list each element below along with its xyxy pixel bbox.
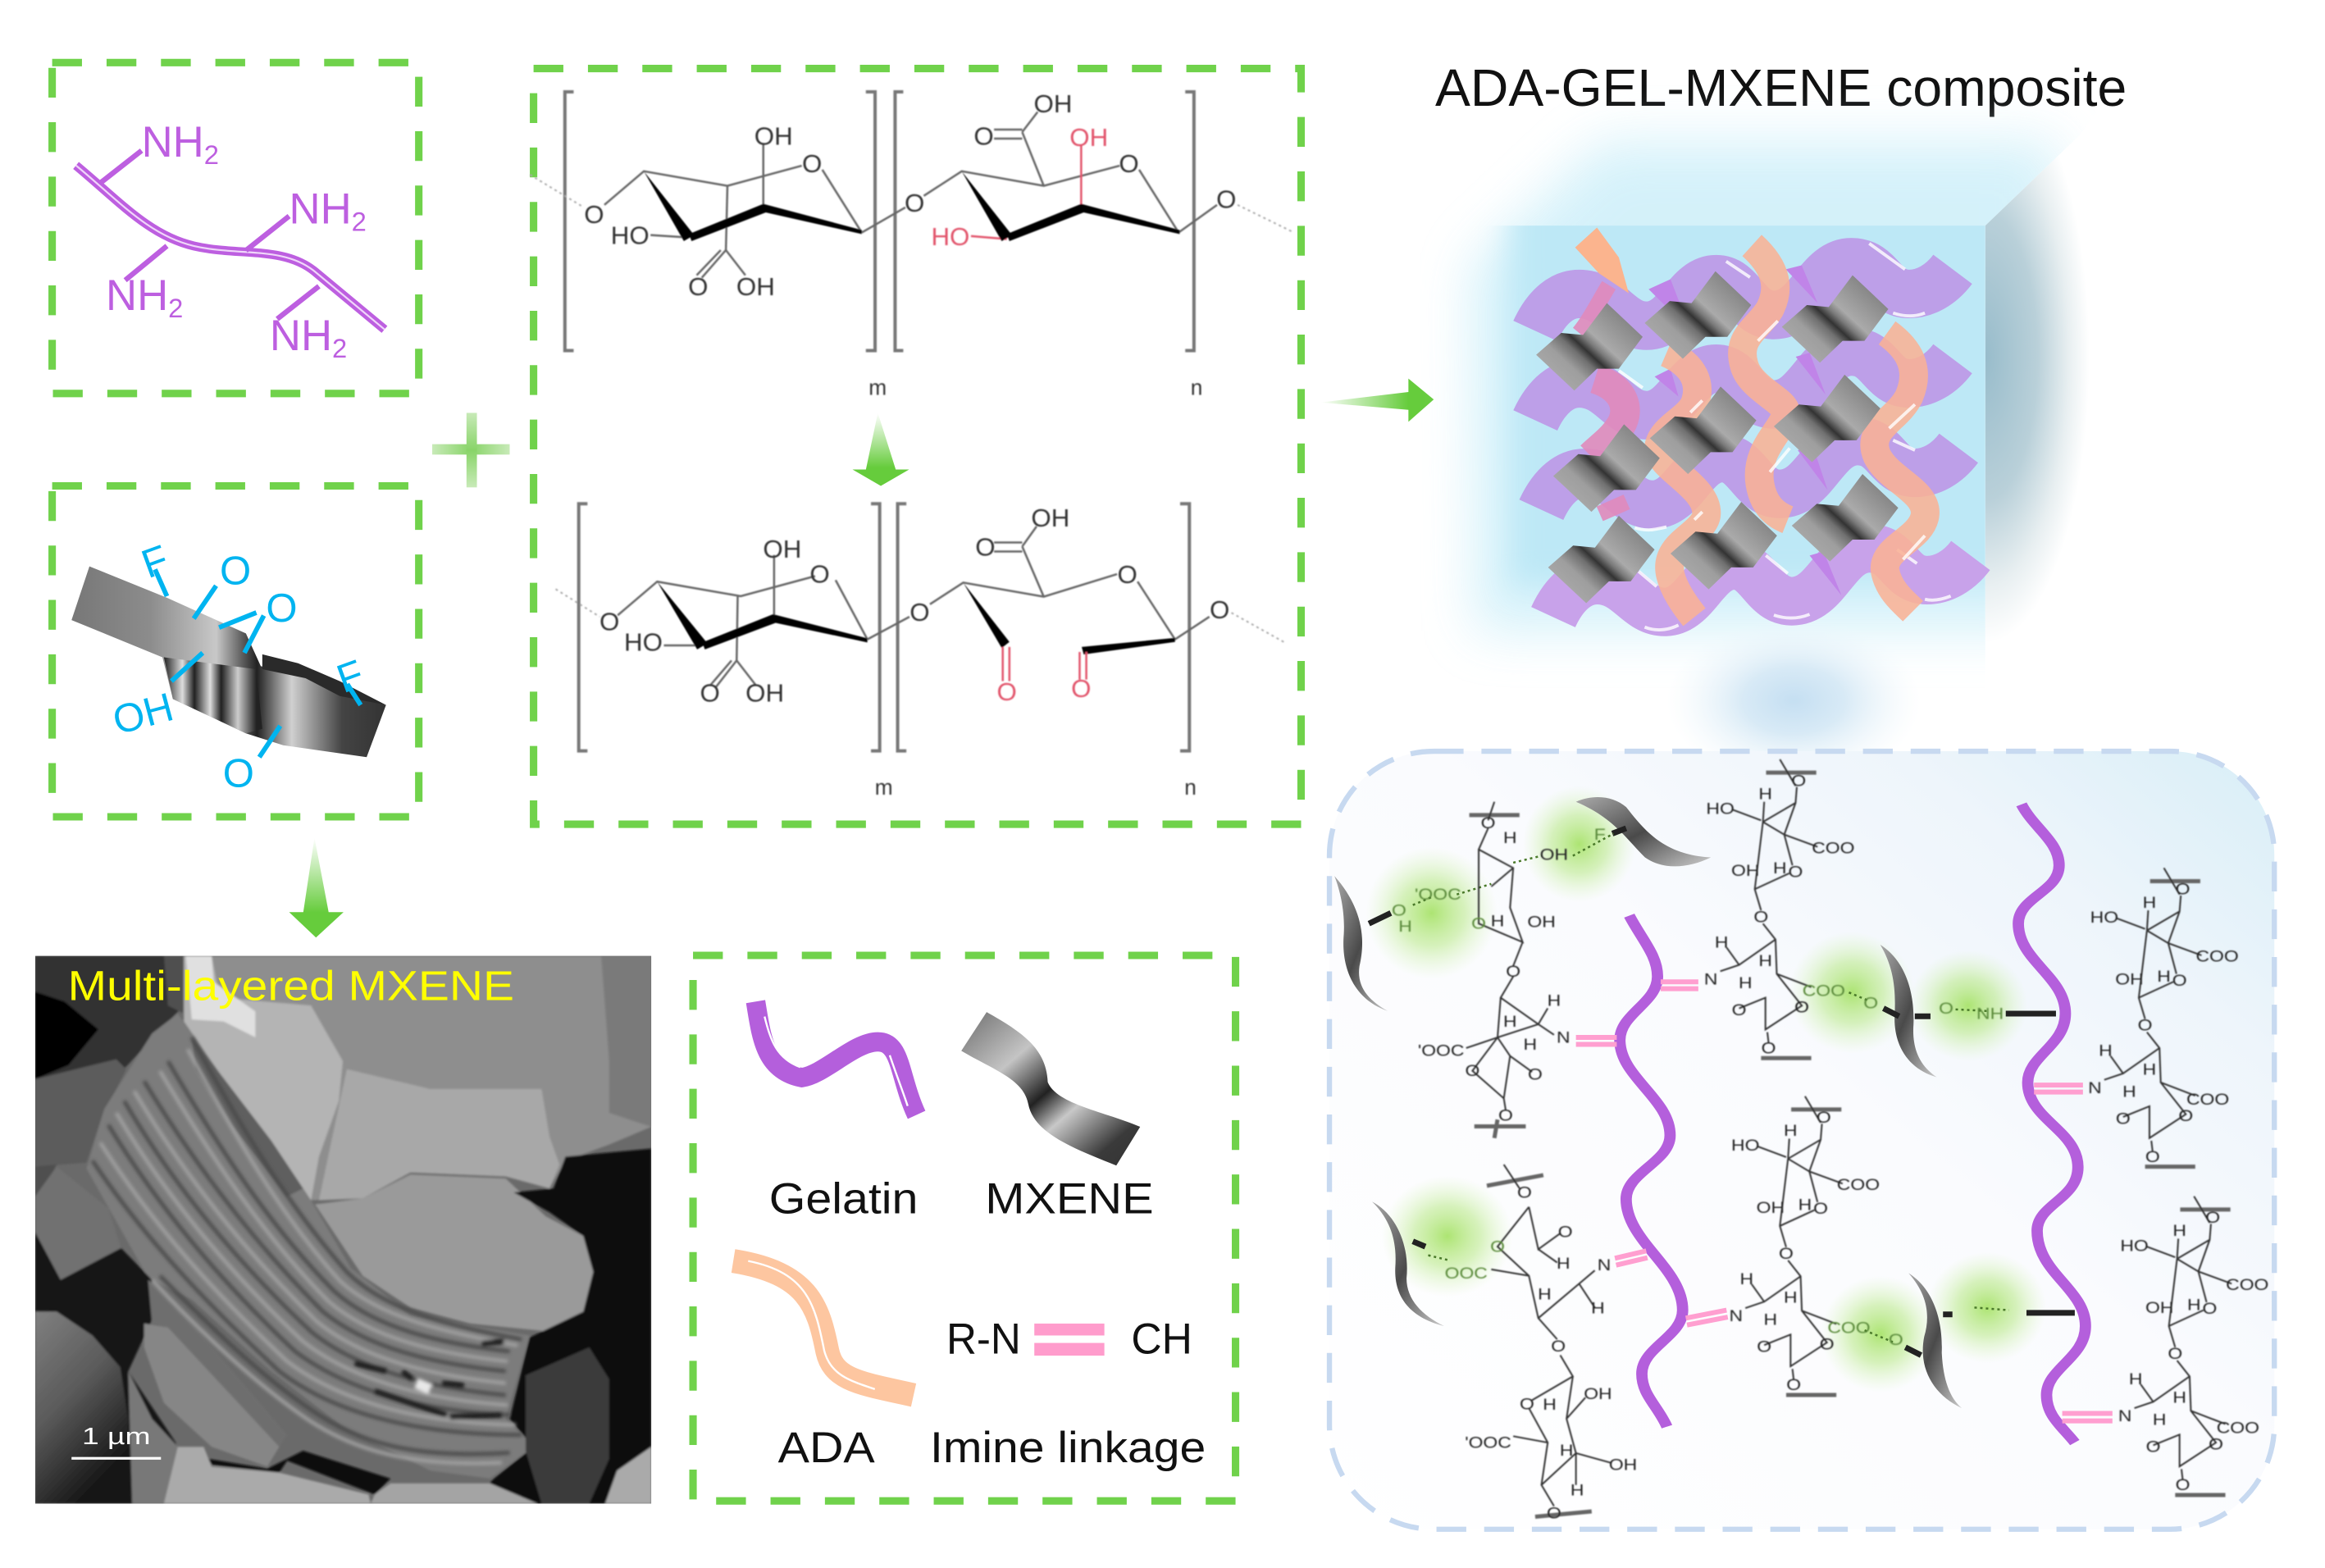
glow blob below the cube <box>1666 618 1921 784</box>
sugar fragment: top centre: N <box>1704 971 1717 988</box>
sugar fragment: lower right: COO <box>2226 1277 2268 1294</box>
NH2 labels: 2 <box>332 333 347 363</box>
hydrogen bond dots <box>1413 833 2009 1342</box>
MXene blocks <box>1536 271 1899 604</box>
panel: MXene sheet with surface groups <box>52 486 419 817</box>
sugar fragment: top centre: O <box>1762 1040 1776 1057</box>
sugar fragment: top left: F <box>1594 827 1606 844</box>
sugar fragment: top left: OH <box>1527 914 1556 931</box>
dialdehyde alginate structure: O <box>1117 560 1137 589</box>
sugar fragment: lower right: H <box>2172 1223 2186 1240</box>
scale bar: 1 µm <box>82 1424 151 1450</box>
sugar fragment: top left: H <box>1398 918 1412 935</box>
SEM layered striations <box>93 1037 522 1463</box>
sugar fragment: top left: H <box>1548 992 1561 1010</box>
panel: SEM micrograph <box>35 956 651 1504</box>
sugar fragment: top centre: H <box>1773 859 1787 877</box>
sugar fragment: top centre: O <box>1789 864 1803 881</box>
alginate structure: O <box>688 272 709 301</box>
dialdehyde alginate structure: m <box>875 775 893 800</box>
sugar fragment: upper right: COO <box>2195 948 2239 965</box>
sugar fragment: lower centre <box>1729 1096 1903 1395</box>
alginate structure: O <box>584 200 604 229</box>
alginate structure: n <box>1191 376 1202 399</box>
sugar fragment: lower centre: H <box>1784 1123 1798 1140</box>
ADA ribbons <box>1575 227 1925 618</box>
dialdehyde alginate structure <box>556 504 1283 800</box>
sugar fragment: lower centre: H <box>1739 1271 1753 1288</box>
sugar fragment: bottom left: H <box>1571 1482 1584 1499</box>
sugar fragment: top left: 'OOC <box>1418 1042 1464 1060</box>
alginate structure: HO <box>611 221 650 250</box>
label: Imine linkage: Imine linkage <box>930 1424 1206 1472</box>
icon: plus sign <box>432 413 510 487</box>
dialdehyde alginate structure: OH <box>763 535 801 563</box>
legend: gelatin ribbon <box>755 1001 917 1114</box>
alginate structure: OH <box>1034 89 1072 118</box>
sugar fragment: top centre: COO <box>1812 840 1854 857</box>
alginate structure: OH <box>1069 123 1108 152</box>
dialdehyde alginate structure: O <box>997 677 1017 706</box>
scale bar <box>71 1424 161 1458</box>
NH2 labels <box>106 118 367 363</box>
dialdehyde alginate structure: O <box>909 598 930 627</box>
sugar fragment: lower right: O <box>2168 1346 2182 1363</box>
sugar fragment: lower right: H <box>2172 1389 2186 1406</box>
dialdehyde alginate structure: n <box>1184 775 1197 800</box>
sugar fragment: lower centre: O <box>1757 1338 1771 1356</box>
sugar fragment: lower right: O <box>2209 1436 2223 1453</box>
dialdehyde alginate structure: O <box>700 679 720 708</box>
legend: MXene ribbon <box>961 1012 1140 1165</box>
sugar fragment: lower right: H <box>2129 1371 2142 1388</box>
sugar fragment: top centre: O <box>1791 773 1806 790</box>
sugar fragment: bottom left: O <box>1547 1505 1561 1522</box>
alginate structure: OH <box>754 122 793 150</box>
sugar fragment: upper right: N <box>2088 1079 2102 1096</box>
sugar fragment: lower right <box>2118 1197 2268 1495</box>
sugar fragment: top centre: O <box>1753 909 1768 926</box>
sugar fragment: lower right: H <box>2153 1411 2166 1429</box>
gelatin backbone <box>76 151 385 330</box>
sugar fragment: upper right: H <box>2157 969 2171 986</box>
sugar fragment: upper right: O <box>2176 881 2190 898</box>
sugar fragment: bottom left: H <box>1560 1443 1573 1460</box>
sugar fragment: upper right: OH <box>2115 971 2144 988</box>
sugar fragment: top left <box>1392 802 1606 1138</box>
sugar fragment: lower centre: O <box>1820 1336 1835 1353</box>
sugar fragment: bottom left: 'OOC <box>1465 1434 1511 1452</box>
sugar fragment: bottom left: H <box>1591 1300 1605 1317</box>
sugar fragment: lower right: O <box>2146 1438 2160 1456</box>
sugar fragment: bottom left: H <box>1538 1286 1552 1303</box>
NH2 labels: 2 <box>204 139 219 170</box>
sugar fragment: top left: O <box>1392 902 1406 919</box>
illustration: composite hydrogel cube <box>1472 71 2090 784</box>
sugar fragment: top centre: O <box>1794 999 1809 1016</box>
gelatin strands <box>1620 805 2086 1443</box>
sugar fragment: bottom left: O <box>1551 1338 1566 1356</box>
dialdehyde alginate structure: O <box>599 608 619 636</box>
label: MXENE: MXENE <box>985 1174 1154 1223</box>
surface groups: O <box>266 586 298 631</box>
label: ADA: ADA <box>778 1424 876 1472</box>
sugar fragment: lower centre: O <box>1813 1201 1828 1218</box>
legend: ADA ribbon <box>733 1261 914 1395</box>
sugar fragment: lower right: OH <box>2145 1299 2173 1316</box>
arrow: down to SEM image <box>289 837 344 937</box>
sugar fragment: top centre <box>1704 759 2004 1058</box>
sugar fragment: lower centre: H <box>1798 1197 1812 1214</box>
sugar fragment: top left: O <box>1528 1066 1543 1083</box>
MXene ribbon <box>71 567 386 757</box>
image caption: Multi-layered MXENE <box>68 963 514 1010</box>
sugar fragment: lower centre: H <box>1764 1311 1777 1329</box>
surface groups: O <box>223 752 254 796</box>
sugar fragment: upper right: H <box>2122 1083 2136 1101</box>
sugar fragment: top centre: O <box>1939 1001 1953 1018</box>
surface groups: F <box>331 652 370 702</box>
sugar fragment: upper right <box>2088 868 2239 1167</box>
MXene sheets <box>1334 797 1962 1408</box>
sugar fragment: top centre: H <box>1758 952 1772 969</box>
sugar fragment: upper right: O <box>2172 972 2187 989</box>
dialdehyde alginate structure: O <box>1071 674 1092 703</box>
sugar fragment: top left: O <box>1471 915 1486 932</box>
imine double bonds <box>1576 982 2113 1421</box>
sugar fragment: top centre: NH <box>1976 1005 2004 1023</box>
alginate structure: O <box>973 122 994 150</box>
surface groups <box>108 537 370 796</box>
sugar fragment: bottom left: H <box>1543 1397 1557 1414</box>
NH2 labels: 2 <box>168 293 183 323</box>
alginate structure: O <box>1216 185 1236 213</box>
sugar fragment: bottom left: OOC <box>1445 1265 1488 1282</box>
sugar fragment: top centre: HO <box>1706 800 1735 818</box>
NH2 labels: NH <box>270 312 332 360</box>
arrow: to composite <box>1320 379 1434 422</box>
sugar fragment: bottom left: O <box>1558 1224 1573 1241</box>
sugar fragment: upper right: O <box>2145 1148 2160 1165</box>
alginate structure: HO <box>931 222 969 251</box>
sugar fragment: lower right: H <box>2187 1297 2201 1314</box>
sugar fragment: top left: OH <box>1540 846 1568 864</box>
sugar fragment: top centre: OH <box>1731 863 1759 880</box>
sugar fragment: upper right: H <box>2143 1061 2156 1078</box>
cube blue glow <box>1472 142 2056 631</box>
sugar fragment: lower centre: H <box>1784 1289 1798 1306</box>
sugar fragment: lower centre: O <box>1817 1110 1831 1127</box>
gelatin ribbons <box>1535 244 1971 630</box>
alginate structure: O <box>1119 149 1139 178</box>
imine formula <box>946 1315 1192 1363</box>
alginate structure: m <box>868 376 887 399</box>
title: ADA-GEL-MXENE composite <box>1435 59 2127 117</box>
sugar fragment: upper right: H <box>2099 1042 2113 1060</box>
sugar fragment: upper right: HO <box>2090 909 2118 926</box>
sugar fragment: top left: O <box>1498 1107 1513 1124</box>
panel: alginate oxidation <box>530 69 1302 824</box>
panel: molecular network detail <box>1329 751 2274 1529</box>
sugar fragment: upper right: O <box>2138 1017 2153 1034</box>
cube side wall <box>1985 163 2081 623</box>
sugar fragment: lower centre: O <box>1786 1377 1801 1394</box>
dialdehyde alginate structure: OH <box>745 679 784 708</box>
sugar fragment: top left: O <box>1465 1063 1479 1080</box>
alginate structure: O <box>905 189 924 217</box>
dialdehyde alginate structure: OH <box>1031 504 1069 532</box>
surface groups: F <box>136 537 174 587</box>
sugar fragment: lower right: HO <box>2120 1238 2149 1255</box>
NH2 labels: NH <box>106 271 168 320</box>
sugar fragment: bottom left: O <box>1490 1238 1505 1256</box>
sugar fragment: upper right: H <box>2143 894 2156 911</box>
surface groups: O <box>220 549 251 593</box>
NH2 labels: NH <box>289 185 352 234</box>
panel: gelatin amine chain <box>52 62 419 394</box>
sugar fragment: lower centre: OH <box>1757 1199 1785 1216</box>
sugar fragment: lower centre: COO <box>1837 1177 1880 1194</box>
sugar fragment: upper right: O <box>2178 1108 2193 1125</box>
dialdehyde alginate structure: HO <box>624 628 663 657</box>
sugar fragment: upper right: COO <box>2186 1092 2229 1109</box>
NH2 labels: 2 <box>352 207 367 237</box>
sugar fragment: top left: H <box>1503 1014 1517 1031</box>
dialdehyde alginate structure: O <box>975 533 996 561</box>
sugar fragment: bottom left: OH <box>1609 1456 1637 1474</box>
sugar fragment: bottom left: O <box>1520 1396 1534 1413</box>
sugar fragment: lower right: N <box>2118 1408 2131 1425</box>
sugar fragment: top left: O <box>1481 815 1495 832</box>
imine formula: R-N <box>946 1315 1021 1363</box>
sugar fragment: top centre: H <box>1715 934 1728 951</box>
alginate structure: OH <box>736 272 775 301</box>
arrow: oxidation step <box>853 413 909 486</box>
sugar fragment: bottom left <box>1445 1165 1637 1522</box>
sugar fragment: lower right: O <box>2176 1477 2190 1494</box>
sugar fragment: lower centre: N <box>1729 1308 1743 1325</box>
sugar fragment: lower centre: O <box>1779 1246 1794 1263</box>
sugar fragment: top centre: O <box>1863 995 1878 1012</box>
hydrogen-bond glows <box>1365 786 2046 1393</box>
sugar fragment: top left: O <box>1506 963 1520 980</box>
sugar fragment: bottom left: O <box>1517 1184 1532 1201</box>
sugar fragment: lower centre: O <box>1889 1332 1903 1349</box>
imine formula: CH <box>1131 1315 1192 1363</box>
panel: legend <box>693 955 1236 1501</box>
sugar fragment: top left: H <box>1491 913 1504 930</box>
sugar fragment: top left: N <box>1557 1029 1571 1046</box>
sugar fragment: top left: 'OOC <box>1415 887 1461 904</box>
sugar fragment: top centre: H <box>1758 786 1772 803</box>
alginate structure <box>530 89 1294 399</box>
dialdehyde alginate structure: O <box>809 560 830 588</box>
sugar fragment: top left: H <box>1503 830 1517 847</box>
tether bonds <box>1369 828 2075 1356</box>
sugar fragment: lower centre: HO <box>1731 1137 1759 1155</box>
sugar fragment: top left: H <box>1524 1036 1537 1053</box>
alginate structure: O <box>802 149 822 178</box>
label: Gelatin: Gelatin <box>769 1174 918 1223</box>
sugar fragment: top centre: COO <box>1803 982 1845 1000</box>
sugar fragment: bottom left: N <box>1598 1257 1611 1274</box>
NH2 labels: NH <box>142 118 204 166</box>
sugar fragment: upper right: O <box>2116 1110 2131 1128</box>
sugar fragment: lower right: O <box>2202 1301 2217 1318</box>
sugar fragment: top centre: O <box>1732 1002 1747 1019</box>
sugar fragment: lower right: COO <box>2217 1420 2259 1437</box>
sugar fragment: lower centre: COO <box>1827 1320 1871 1337</box>
sugar fragment: bottom left: OH <box>1584 1386 1612 1403</box>
dialdehyde alginate structure: O <box>1210 595 1229 624</box>
surface groups: OH <box>108 685 178 744</box>
sugar fragment: lower right: O <box>2205 1210 2220 1227</box>
SEM rock shapes <box>35 956 651 1504</box>
sugar fragment: top centre: H <box>1739 975 1753 992</box>
sugar fragment: bottom left: H <box>1557 1256 1571 1273</box>
